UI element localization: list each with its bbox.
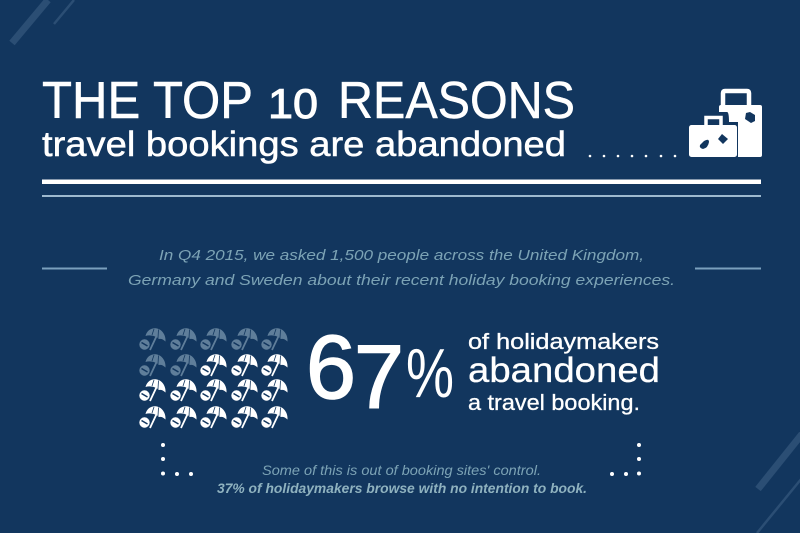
statistic caption: a travel booking. <box>468 390 640 415</box>
title: travel bookings are abandoned <box>42 125 566 164</box>
intro text <box>128 247 675 289</box>
title <box>42 72 575 164</box>
corner dots right <box>610 443 641 476</box>
divider lines <box>42 180 761 197</box>
statistic caption: abandoned <box>468 351 660 390</box>
intro text: Germany and Sweden about their recent holiday booking experiences. <box>128 272 675 289</box>
big statistic: 67% <box>306 318 454 428</box>
footnote text <box>217 463 587 496</box>
title: THE TOP <box>42 72 253 130</box>
intro text: In Q4 2015, we asked 1,500 people across the United Kingdom, <box>159 247 644 264</box>
icon: luggage <box>689 91 762 160</box>
statistic caption <box>468 329 660 415</box>
intro side rules <box>42 268 761 270</box>
big statistic: 67%: 7 <box>354 328 404 428</box>
corner dots left <box>161 443 193 476</box>
statistic caption: of holidaymakers <box>468 329 659 354</box>
big statistic: 67%: % <box>406 334 454 412</box>
footnote text: 37% of holidaymakers browse with no intention to book. <box>217 481 587 496</box>
big statistic: 67%: 6 <box>306 318 356 418</box>
footnote text: Some of this is out of booking sites' control. <box>262 463 541 478</box>
dotted trail to luggage icon <box>589 155 676 157</box>
pictogram: umbrella grid <box>139 328 288 428</box>
title: 10 <box>268 80 318 127</box>
title: REASONS <box>338 72 575 130</box>
